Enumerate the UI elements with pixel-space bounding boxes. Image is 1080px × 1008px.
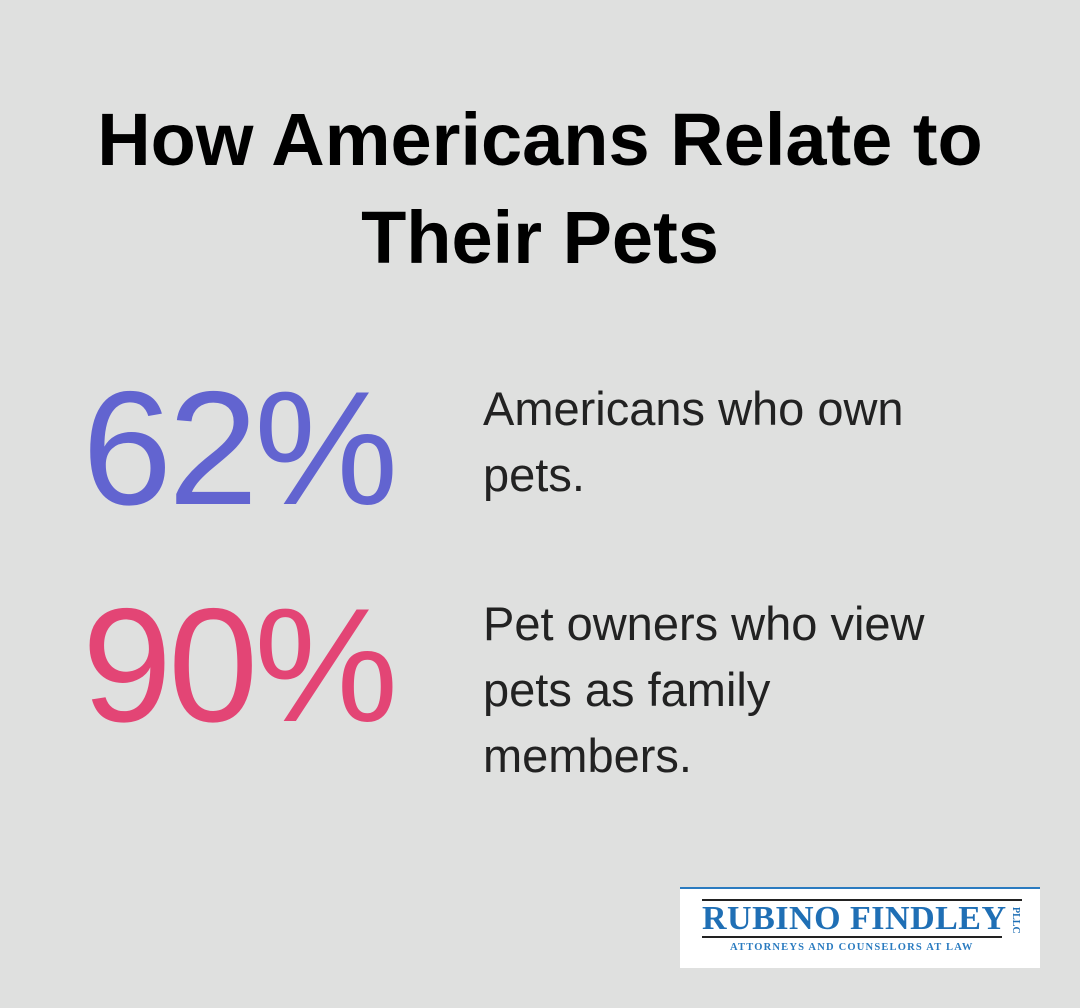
text: family members xyxy=(483,597,924,782)
title: Their Pets xyxy=(361,196,719,279)
text: family members: Pet owners who view xyxy=(483,597,924,650)
logo: Rubino Findley: ATTORNEYS AND COUNSELORS AT LAW xyxy=(730,942,974,953)
text: family members: members. xyxy=(483,729,692,782)
text: family members: pets as family xyxy=(483,663,770,716)
stat: 90%: 90% xyxy=(82,575,394,756)
text: pet owners xyxy=(483,382,904,501)
logo: Rubino Findley: PLLC xyxy=(1010,907,1021,934)
text: pet owners: Americans who own xyxy=(483,382,904,435)
logo: Rubino Findley xyxy=(680,887,1040,968)
title: How Americans Relate to xyxy=(97,98,983,181)
title xyxy=(97,98,983,279)
logo: Rubino Findley: RUBINO FINDLEY xyxy=(702,900,1007,937)
text: pet owners: pets. xyxy=(483,448,585,501)
stat: 62%: 62% xyxy=(82,358,394,539)
